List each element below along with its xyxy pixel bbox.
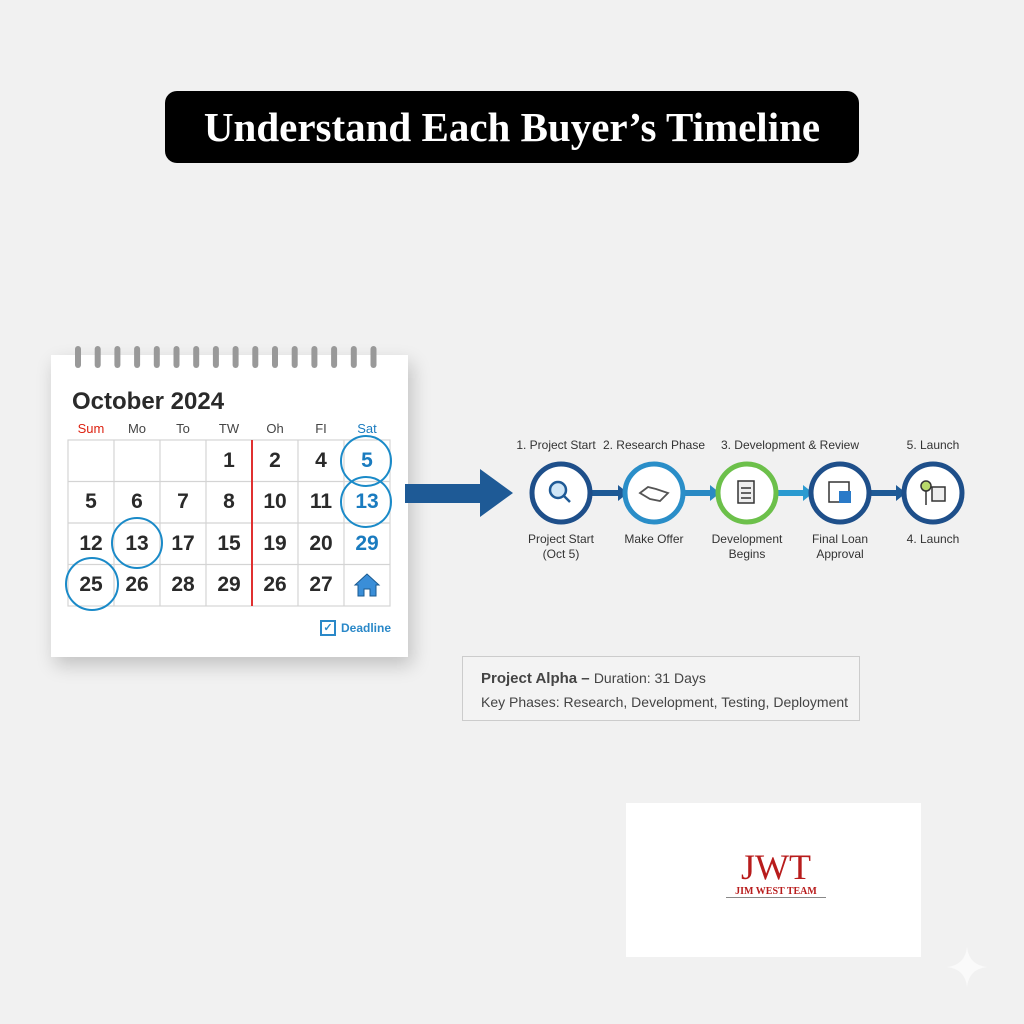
icon: key calendar — [921, 481, 945, 505]
text: 4 — [315, 449, 327, 472]
text: 15 — [217, 532, 241, 555]
logo: JWT — [726, 847, 826, 898]
text: 5 — [361, 449, 373, 472]
text: 2 — [269, 449, 281, 472]
icon: magnifier — [550, 482, 570, 502]
text: 29 — [217, 573, 241, 596]
step labels bottom — [528, 532, 959, 561]
icon: house — [355, 574, 379, 596]
text: 26 — [263, 573, 287, 596]
step labels top — [516, 438, 959, 452]
legend: deadline — [320, 620, 391, 636]
legend: deadline: ✓ — [323, 622, 333, 634]
text: Project Start — [528, 532, 594, 546]
icon: sparkle — [950, 950, 984, 984]
text: 1. Project Start — [516, 438, 596, 452]
calendar numbers — [79, 449, 379, 596]
text: Sat — [357, 421, 377, 436]
text: Development — [712, 532, 782, 546]
text: 19 — [263, 532, 287, 555]
text: 20 — [309, 532, 333, 555]
text: 8 — [223, 490, 235, 513]
text: Oh — [266, 421, 284, 436]
text: 3. Development & Review — [721, 438, 859, 452]
legend: deadline: Deadline — [341, 621, 391, 635]
text: 13 — [355, 490, 379, 513]
text: 27 — [309, 573, 333, 596]
timeline — [530, 462, 964, 524]
text: Approval — [816, 547, 864, 561]
text: 29 — [355, 532, 379, 555]
text: 5. Launch — [907, 438, 959, 452]
panel: calendar — [46, 346, 421, 674]
text: 26 — [125, 573, 149, 596]
icon: clipboard — [738, 481, 754, 503]
text: Mo — [128, 421, 146, 436]
title: Understand Each Buyer’s Timeline — [204, 104, 820, 150]
text: 12 — [79, 532, 103, 555]
title — [165, 91, 859, 163]
text: 10 — [263, 490, 287, 513]
text: 2. Research Phase — [603, 438, 705, 452]
text: Sum — [78, 421, 104, 436]
text: (Oct 5) — [543, 547, 579, 561]
text: 25 — [79, 573, 103, 596]
logo: JWT: JWT — [741, 847, 811, 887]
logo panel — [626, 803, 921, 957]
day headers — [78, 421, 377, 436]
icon: calendar thumbs up — [829, 482, 849, 502]
text: Make Offer — [624, 532, 684, 546]
text: 7 — [177, 490, 189, 513]
text: Begins — [729, 547, 765, 561]
text: 5 — [85, 490, 97, 513]
text: 11 — [310, 490, 332, 513]
text: TW — [219, 421, 239, 436]
logo: JWT: JIM WEST TEAM — [735, 886, 817, 897]
text: 4. Launch — [907, 532, 959, 546]
arrow: calendar to timeline — [405, 469, 513, 517]
text: To — [176, 421, 190, 436]
text: 1 — [223, 449, 235, 472]
text: 17 — [171, 532, 195, 555]
calendar grid — [65, 435, 392, 611]
text: Final Loan — [812, 532, 868, 546]
info box: project alpha — [462, 656, 860, 721]
text: 13 — [125, 532, 149, 555]
text: FI — [315, 421, 327, 436]
text: 6 — [131, 490, 143, 513]
text: 28 — [171, 573, 195, 596]
info box: project alpha: Project Alpha – Duration: 31 Days — [481, 670, 706, 687]
icon: spiral rings — [75, 346, 376, 368]
calendar heading: October 2024 — [72, 388, 224, 415]
icon: handshake — [640, 487, 668, 501]
info box: project alpha: Key Phases: Research, Development, Testing, Deployment — [481, 694, 848, 710]
